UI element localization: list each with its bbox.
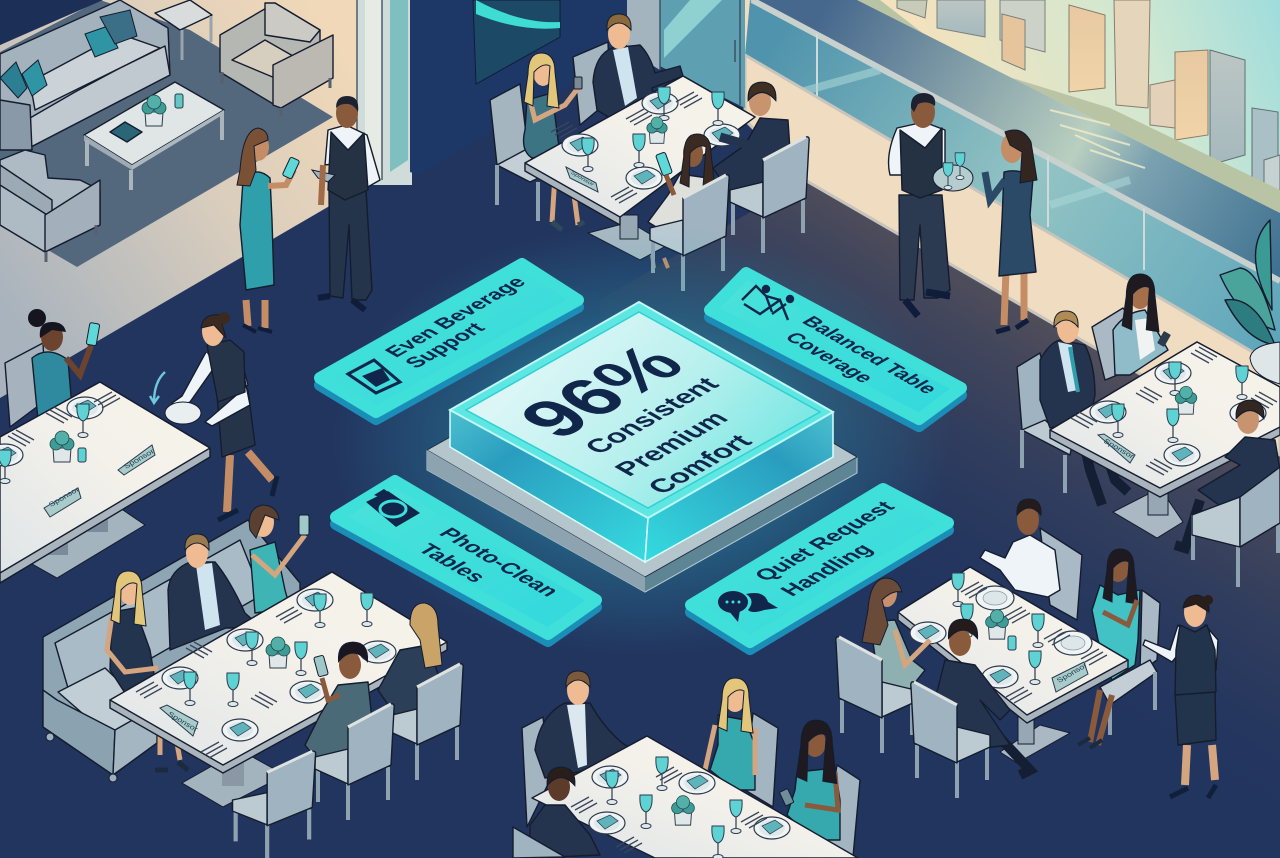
label: Tables [413, 540, 492, 586]
pedestal table right [1113, 488, 1183, 538]
glass cube sides [450, 410, 833, 562]
blonde woman from behind [378, 603, 442, 725]
man right table right [1175, 400, 1280, 548]
woman right in teal [1078, 549, 1140, 748]
man in white shirt [980, 499, 1060, 597]
sponsor tag table one [566, 167, 598, 192]
patio door behind table [627, 0, 745, 108]
sponsor tag bottom left: Sponsor [166, 710, 200, 733]
booth sofa [43, 520, 300, 782]
table right [1017, 274, 1280, 587]
seated man table one [593, 14, 683, 118]
icon: water glass [348, 360, 400, 393]
table top one [525, 76, 755, 225]
wall column with panel [410, 0, 627, 175]
seated woman left [5, 309, 100, 427]
dark haired woman bottom [779, 720, 840, 840]
card: even beverage support [320, 264, 578, 419]
seated blonde woman table one [524, 53, 584, 230]
chair front bottom [513, 827, 565, 858]
chairs behind table one [490, 42, 610, 221]
chair front table one [650, 175, 729, 291]
waiter with tablet [312, 96, 380, 310]
glass balustrade [745, 0, 1280, 368]
blonde woman bottom [705, 678, 755, 790]
lounge rug [0, 0, 333, 267]
sponsor tag table right [1098, 434, 1136, 463]
glass top surface [450, 302, 833, 518]
lounge floor [0, 0, 357, 398]
waitress with plate [150, 312, 277, 520]
balcony walkway [745, 55, 1280, 455]
sponsor tags table left: Sponsor [47, 485, 81, 508]
platform 96 percent [427, 302, 857, 592]
teal woman booth [249, 505, 309, 613]
base slab [427, 330, 857, 592]
man lower right [935, 619, 1030, 775]
plant right [1220, 220, 1280, 384]
sponsor tag bottom left [160, 705, 200, 736]
man from behind bottom [530, 767, 600, 858]
top left wall [0, 0, 103, 45]
table bottom centre [513, 671, 860, 858]
sponsor tag table one: Sponsor [569, 170, 596, 187]
waiter with tray [889, 93, 973, 316]
seated woman in white table one [648, 134, 715, 268]
sponsor tags table left [44, 445, 156, 517]
table top bottom [532, 736, 858, 858]
waitress right [1143, 595, 1218, 798]
blonde woman booth [107, 571, 188, 770]
woman left lower right [862, 578, 930, 695]
chair dark haired woman bottom [825, 765, 860, 857]
sponsor tag lower right [1052, 661, 1089, 692]
label: Support [400, 320, 490, 371]
man bottom [535, 671, 638, 778]
label: Coverage [780, 330, 878, 386]
table one [490, 14, 809, 291]
table bottom left [110, 572, 463, 858]
icon: camera [366, 489, 420, 527]
diners on booth [107, 505, 309, 770]
table left [0, 382, 210, 583]
icon: people at table [742, 286, 793, 320]
glass door [357, 0, 412, 185]
card: photo-clean tables [336, 481, 596, 641]
city skyline view [857, 0, 1280, 213]
label: Photo-Clean [434, 524, 565, 600]
central glow [332, 225, 952, 655]
sponsor tags table left: Sponsor [122, 447, 156, 470]
chair right table one [730, 137, 809, 253]
woman back table right [1092, 274, 1171, 380]
chairs bottom left [384, 664, 463, 780]
seated man from behind table one [713, 82, 790, 193]
label: Quiet Request [749, 497, 901, 584]
pedestal table one [588, 215, 668, 260]
chair man bottom [522, 717, 550, 827]
label: Even Beverage [380, 274, 531, 360]
percentage: 96% [501, 334, 702, 449]
caption: consistent premium comfort: Premium [607, 407, 735, 480]
label: Handling [775, 540, 878, 599]
chair left table right [1017, 353, 1072, 493]
table top lower right [898, 567, 1128, 723]
table lower right [836, 499, 1160, 798]
card: balanced table coverage [710, 273, 961, 426]
card: quiet request handling [691, 489, 948, 649]
chair behind man in white [1040, 528, 1082, 620]
armchair top [220, 3, 333, 116]
chair front lower right [911, 682, 990, 798]
chair for woman right [1100, 590, 1160, 735]
side table [155, 0, 212, 60]
armchair left [0, 150, 100, 262]
table top right [1050, 342, 1280, 497]
dark haired woman with phone [305, 642, 372, 770]
icon: chat bubbles [718, 591, 778, 622]
chair left lower right [836, 637, 915, 753]
caption: consistent premium comfort: Comfort [640, 430, 758, 498]
caption: consistent premium comfort: Consistent [577, 373, 726, 458]
river [757, 0, 1280, 281]
caption: consistent premium comfort [577, 373, 758, 498]
chair right table right [1192, 467, 1280, 587]
sponsor tag lower right: Sponsor [1055, 661, 1089, 684]
woman with phone standing [237, 128, 300, 332]
label: Balanced Table [797, 314, 942, 397]
man booth [168, 534, 255, 650]
woman in navy dress [985, 130, 1037, 332]
coffee table [84, 82, 224, 190]
sofa [0, 0, 170, 150]
sponsor tag table right: Sponsor [1102, 437, 1136, 460]
chair blonde bottom [745, 713, 778, 807]
man left table right [1040, 311, 1128, 505]
pedestal lower right [1000, 716, 1070, 763]
